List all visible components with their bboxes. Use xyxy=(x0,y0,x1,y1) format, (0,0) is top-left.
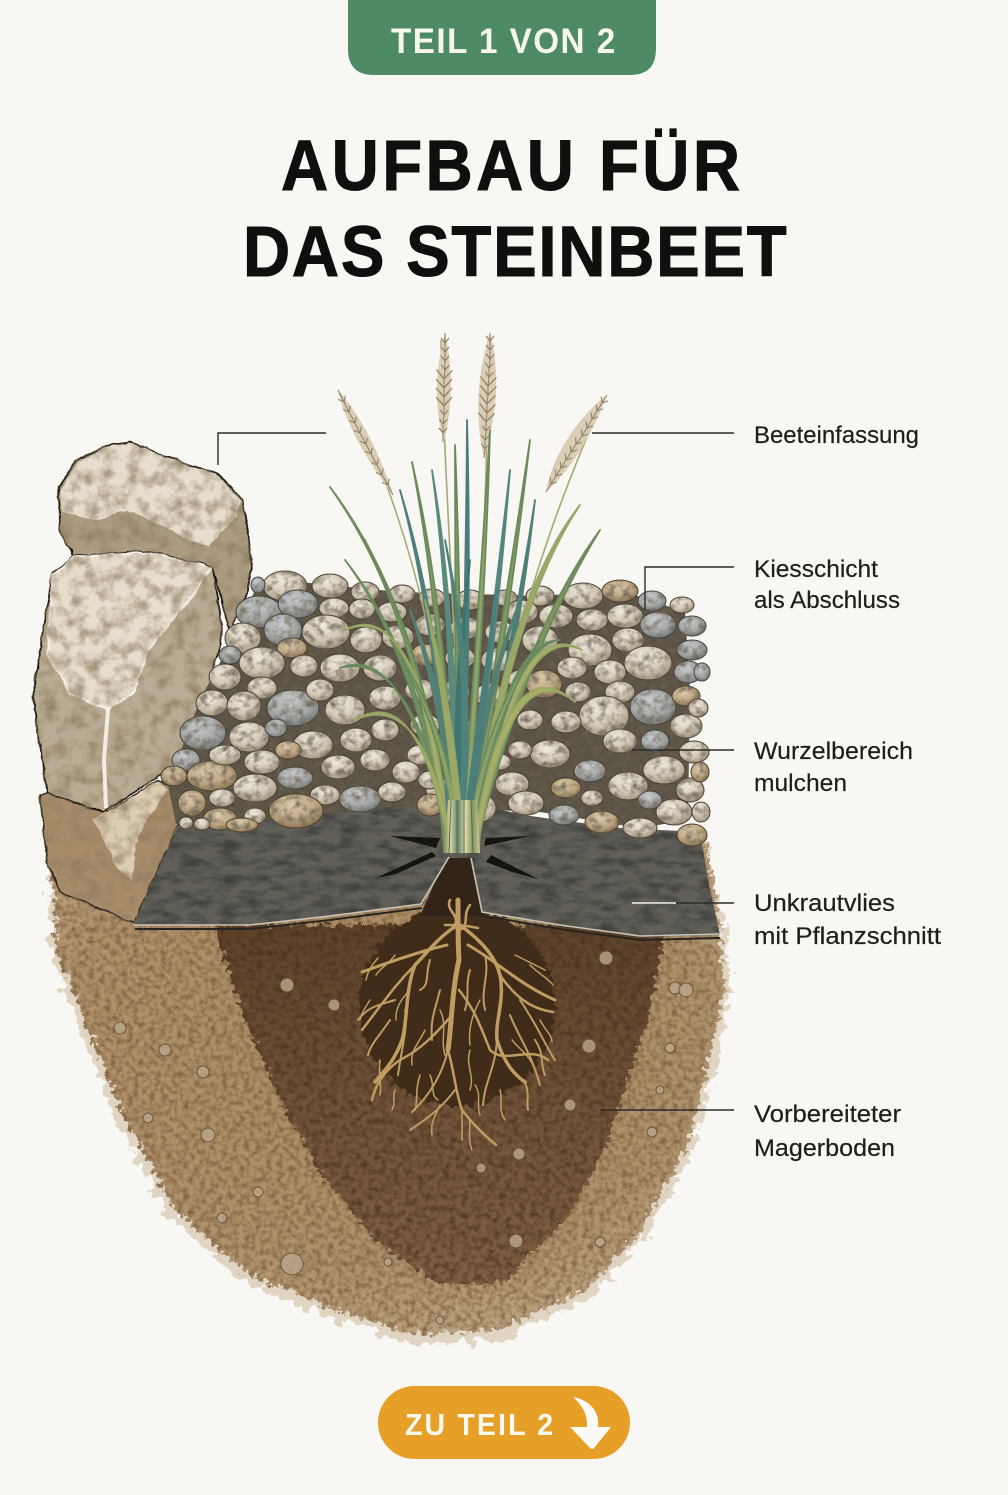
label: Vorbereiteter Magerboden xyxy=(754,1101,901,1162)
label: Kiesschicht als Abschluss xyxy=(754,556,900,614)
roots xyxy=(358,900,555,1150)
title: AUFBAU FÜR xyxy=(281,127,740,206)
grass plume: centre right xyxy=(478,333,496,458)
root ball xyxy=(359,906,555,1106)
label: Wurzelbereich mulchen xyxy=(754,738,913,797)
label: Unkrautvlies mit Pflanzschnitt: Unkrautvlies xyxy=(754,890,895,917)
rock: lower soil block xyxy=(40,780,180,922)
plant xyxy=(330,333,607,853)
rock: large front boulder xyxy=(33,551,223,812)
leader: Beeteinfassung left bracket xyxy=(218,433,326,465)
grass blades xyxy=(330,420,600,850)
neck of soil under plant xyxy=(420,850,486,916)
illustration: soil cross-section xyxy=(48,800,730,1344)
label: Wurzelbereich mulchen: mulchen xyxy=(754,770,847,797)
leader: Kiesschicht xyxy=(645,567,734,610)
title: DAS STEINBEET xyxy=(243,213,787,292)
label: Unkrautvlies mit Pflanzschnitt: mit Pflanzschnitt xyxy=(754,923,941,950)
grass plume: centre left xyxy=(437,333,451,442)
icon: curved down arrow xyxy=(570,1397,611,1449)
grass plume: far right xyxy=(546,395,607,492)
soil pebbles xyxy=(114,951,693,1324)
plume stems xyxy=(365,340,604,830)
label: Kiesschicht als Abschluss: Kiesschicht xyxy=(754,556,878,583)
soft watercolor soil halo xyxy=(48,800,730,1344)
outer lean soil xyxy=(48,800,724,1334)
rock: upper boulder xyxy=(58,442,252,632)
header tab: Teil 1 von 2 xyxy=(348,0,656,75)
plant base stems xyxy=(443,800,480,853)
header tab: Teil 1 von 2: TEIL 1 VON 2 xyxy=(391,22,615,61)
leader: Beeteinfassung xyxy=(592,432,734,434)
button: zu Teil 2 xyxy=(378,1386,630,1459)
grass plume: far left xyxy=(338,390,393,495)
gravel layer xyxy=(161,571,710,846)
leader: Magerboden xyxy=(600,1109,734,1111)
label: Unkrautvlies mit Pflanzschnitt xyxy=(754,890,941,950)
gravel backing xyxy=(168,582,690,828)
leader: Wurzelbereich xyxy=(632,749,734,751)
planting cuts xyxy=(376,836,538,879)
pebbles xyxy=(161,571,710,846)
dark prepared pit xyxy=(214,925,666,1285)
label: Vorbereiteter Magerboden: Vorbereiteter xyxy=(754,1101,901,1128)
label: Vorbereiteter Magerboden: Magerboden xyxy=(754,1135,895,1162)
fleece front edge xyxy=(133,857,720,936)
title xyxy=(243,127,787,292)
label: Beeteinfassung: Beeteinfassung xyxy=(754,422,919,449)
leader: Unkrautvlies xyxy=(632,902,734,904)
label: Kiesschicht als Abschluss: als Abschluss xyxy=(754,587,900,614)
button: zu Teil 2: ZU TEIL 2 xyxy=(405,1408,553,1442)
weed fleece xyxy=(133,800,720,940)
label: Wurzelbereich mulchen: Wurzelbereich xyxy=(754,738,913,765)
